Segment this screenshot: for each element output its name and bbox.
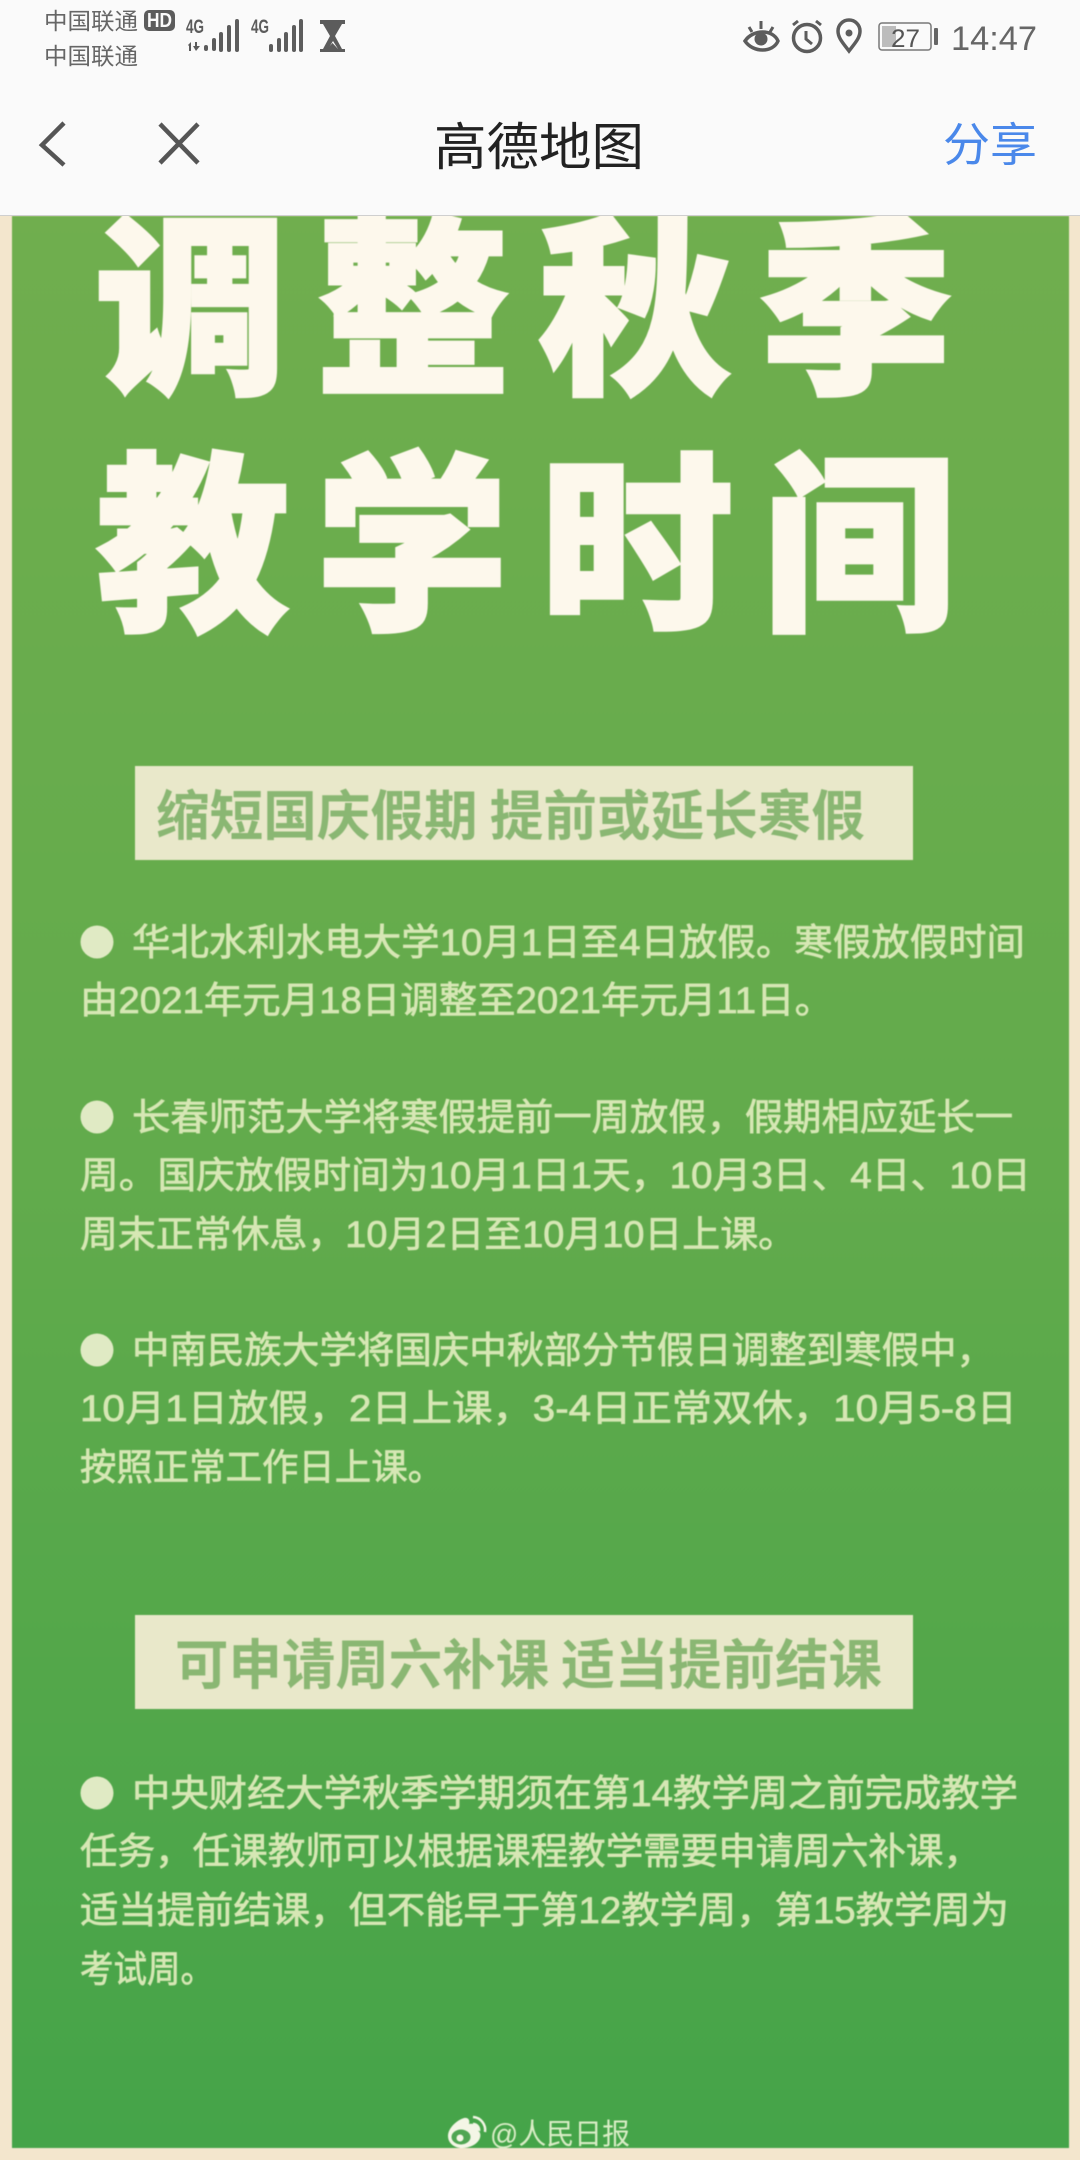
signal icons: 4G xyxy=(186,17,204,38)
title line 2: 教学时间 xyxy=(97,393,955,671)
watermark: weibo @人民日报: @人民日报 xyxy=(490,2118,630,2151)
icon: weibo xyxy=(448,2117,485,2148)
signal icons: 4G xyxy=(251,17,269,38)
title line 1: 调整秋季 xyxy=(95,156,952,434)
icon: location pin xyxy=(838,20,860,51)
section heading 2: 可申请周六补课 适当提前结课 xyxy=(175,1621,882,1700)
battery xyxy=(879,23,938,53)
carrier labels: 中国联通 xyxy=(44,8,138,34)
paragraph 1: 由2021年元月18日调整至2021年元月11日。 xyxy=(80,980,833,1021)
icon: back xyxy=(42,123,64,165)
paragraph 4: 任务，任课教师可以根据课程教学需要申请周六补课， xyxy=(80,1831,981,1872)
carrier labels: 中国联通 xyxy=(44,43,138,69)
paragraph 2: 长春师范大学将寒假提前一周放假，假期相应延长一 xyxy=(132,1097,1013,1138)
section heading 1: 缩短国庆假期 提前或延长寒假 xyxy=(156,772,865,851)
app header xyxy=(0,0,1080,216)
clock: 14:47 xyxy=(951,20,1037,58)
icon: hourglass xyxy=(320,20,345,52)
paragraph 1: 华北水利水电大学10月1日至4日放假。寒假放假时间 xyxy=(132,922,1025,963)
paragraph 2: 周。国庆放假时间为10月1日1天，10月3日、4日、10日 xyxy=(80,1155,1031,1196)
paragraph 2: 周末正常休息，10月2日至10月10日上课。 xyxy=(80,1214,796,1255)
paragraph 4: 中央财经大学秋季学期须在第14教学周之前完成教学 xyxy=(132,1773,1018,1814)
paragraph 3: 10月1日放假，2日上课，3-4日正常双休，10月5-8日 xyxy=(80,1388,1017,1429)
battery: 27 xyxy=(891,25,920,53)
icon: alarm clock xyxy=(793,21,821,52)
paragraph 4: 考试周。 xyxy=(80,1949,214,1990)
icon: close xyxy=(160,124,198,163)
share link: 分享 xyxy=(943,109,1037,175)
paragraph 1 xyxy=(80,922,1025,1021)
signal icons xyxy=(186,17,303,52)
HD badge: HD xyxy=(147,10,172,32)
icon: eye xyxy=(745,21,778,50)
carrier labels xyxy=(44,8,138,69)
paragraph 3: 中南民族大学将国庆中秋部分节假日调整到寒假中， xyxy=(132,1330,994,1371)
page title: 高德地图 xyxy=(434,106,644,180)
paragraph 2 xyxy=(80,1097,1031,1255)
paragraph 4: 适当提前结课，但不能早于第12教学周，第15教学周为 xyxy=(80,1890,1009,1931)
paragraph 4 xyxy=(80,1773,1018,1990)
paragraph 3 xyxy=(80,1330,1017,1488)
paragraph 3: 按照正常工作日上课。 xyxy=(80,1447,444,1488)
